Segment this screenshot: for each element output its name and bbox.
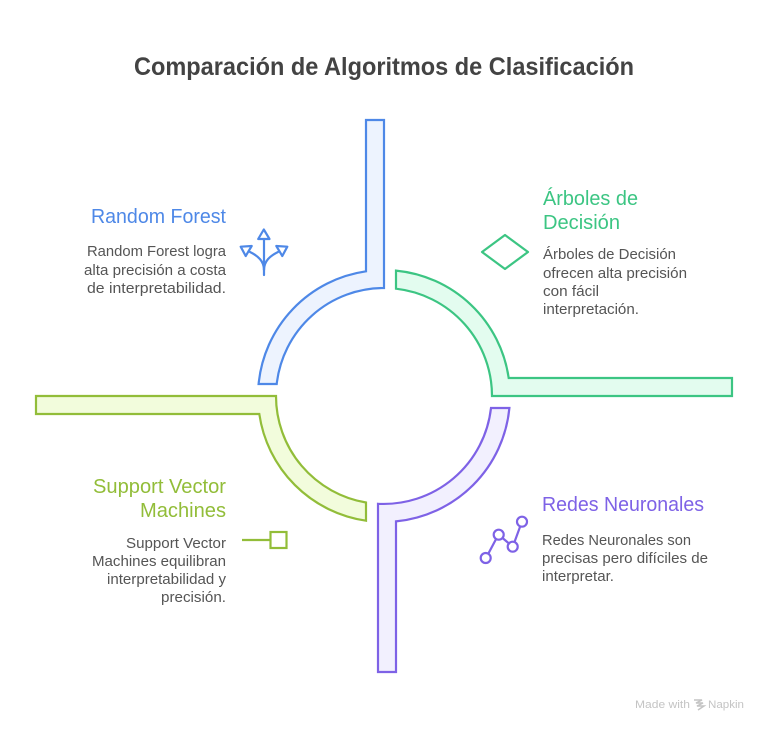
text block: Support Vector Machines: Support Vector: [126, 536, 226, 552]
heading: Redes Neuronales: Redes Neuronales: [542, 493, 704, 516]
heading: Random Forest: Random Forest: [91, 205, 226, 228]
text block: Random Forest: de interpretabilidad.: [87, 281, 226, 297]
panel: Support Vector Machines: [36, 396, 366, 606]
text block: Árboles de Decisión: ofrecen alta precisión: [543, 266, 687, 282]
text block: Support Vector Machines: Machines equilibran: [92, 554, 226, 570]
panel: Árboles de Decisión: [396, 187, 732, 396]
heading: Support Vector Machines: Machines: [140, 499, 226, 522]
text block: Random Forest: [84, 244, 227, 297]
icon: square with line: [242, 532, 286, 548]
text block: Árboles de Decisión: con fácil: [543, 284, 599, 300]
text block: Árboles de Decisión: Árboles de Decisión: [543, 246, 676, 263]
text block: Árboles de Decisión: [543, 246, 687, 318]
panel: Random Forest: [84, 120, 384, 384]
panel: Redes Neuronales: [378, 408, 708, 672]
arc shape: Árboles de Decisión: [396, 271, 732, 396]
arc shape: Support Vector Machines: [36, 396, 366, 521]
watermark: Made with Napkin: Napkin: [708, 699, 744, 711]
heading: Árboles de Decisión: Árboles de: [543, 187, 638, 210]
watermark: Made with Napkin: [635, 699, 744, 711]
heading: Support Vector Machines: [93, 475, 226, 522]
heading: Support Vector Machines: Support Vector: [93, 475, 226, 498]
title: Comparación de Algoritmos de Clasificación: [134, 53, 634, 81]
icon: diverging arrows: [241, 230, 287, 275]
heading: Árboles de Decisión: Decisión: [543, 211, 620, 234]
text block: Random Forest: Random Forest logra: [87, 244, 227, 260]
text block: Random Forest: alta precisión a costa: [84, 263, 227, 279]
icon: connected nodes: [481, 517, 527, 563]
icon: diamond: [482, 235, 528, 269]
text block: Redes Neuronales: [542, 533, 708, 585]
text block: Redes Neuronales: precisas pero difíciles de: [542, 551, 708, 567]
heading: Árboles de Decisión: [543, 187, 638, 234]
text block: Support Vector Machines: precisión.: [161, 590, 226, 606]
text block: Support Vector Machines: [92, 536, 227, 606]
arc shape: Random Forest: [259, 120, 384, 384]
arc shape: Redes Neuronales: [378, 408, 509, 672]
text block: Support Vector Machines: interpretabilidad y: [107, 572, 227, 588]
text block: Redes Neuronales: Redes Neuronales son: [542, 533, 691, 549]
text block: Árboles de Decisión: interpretación.: [543, 302, 639, 318]
watermark: Made with Napkin: Made with: [635, 699, 690, 711]
text block: Redes Neuronales: interpretar.: [542, 569, 614, 585]
